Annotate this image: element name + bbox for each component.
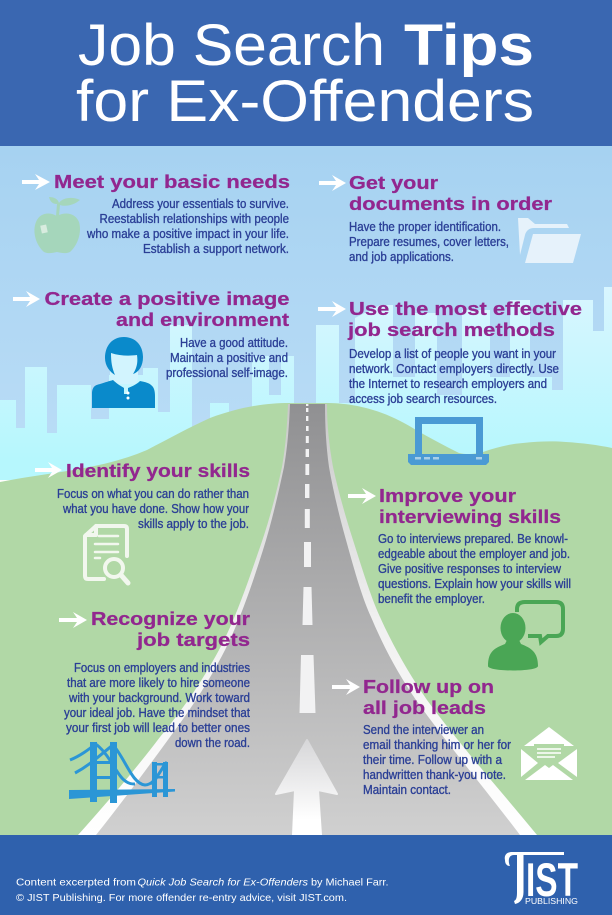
landscape: green hills [0,403,612,835]
heading: documents in order [349,194,552,214]
logo: JIST Publishing: IST [526,853,578,906]
body text: the Internet to research employers and [349,376,547,391]
body text: Have a good attitude. [180,335,288,350]
body text: benefit the employer. [378,591,485,606]
heading: job targets [136,630,250,650]
icon: envelope [521,727,577,780]
body text: Reestablish relationships with people [100,211,289,226]
arrow [332,679,360,695]
header band [0,0,612,146]
body text: network. Contact employers directly. Use [349,361,559,376]
body text: Prepare resumes, cover letters, [349,234,509,249]
heading: Meet your basic needs [54,172,290,192]
icon: bridge [69,742,175,803]
title: Tips [404,13,534,78]
arrow [35,462,62,478]
body text: questions. Explain how your skills will [378,576,571,591]
title: Job Search [78,13,385,78]
arrow [22,174,50,190]
heading [44,289,290,330]
footer credit text: Quick Job Search for Ex-Offenders [138,876,309,888]
heading: Improve your [379,486,516,506]
body text: edgeable about the employer and job. [378,546,570,561]
road [78,404,537,835]
footer band [0,835,612,915]
tip: create a positive image [13,289,290,408]
logo: JIST Publishing: PUBLISHING [525,897,578,906]
body text [166,335,288,380]
arrow [319,175,346,191]
body text [363,722,512,797]
body text: who make a positive impact in your life. [86,226,289,241]
body text: Have the proper identification. [349,219,501,234]
footer credit text: by Michael Farr. [311,876,388,888]
heading: all job leads [363,698,486,718]
heading: Create a positive image [44,289,290,309]
body text [378,531,571,606]
body text [64,660,250,750]
background: city skyline [0,287,612,480]
heading [347,299,582,340]
arrow [59,612,87,628]
road edge lines [78,404,537,835]
body text: Send the interviewer an [363,722,484,737]
body text: with your background. Work toward [68,690,250,705]
heading: job search methods [347,320,555,340]
centre dashes [300,404,316,713]
footer credit text [16,876,388,904]
road direction arrow [276,740,337,835]
heading: Follow up on [363,677,494,697]
road surface [96,404,520,835]
body text: and job applications. [349,249,454,264]
tip: meet your basic needs [22,172,290,256]
footer credit text: © JIST Publishing. For more offender re-entry advice, visit JIST.com. [16,892,347,904]
tip: improve your interviewing skills [348,486,571,670]
body text: Maintain a positive and [170,350,288,365]
heading [349,173,552,214]
body text: access job search resources. [349,391,497,406]
icon: laptop [408,417,489,465]
body text: Focus on what you can do rather than [57,486,249,501]
logo: JIST Publishing [505,852,578,906]
body text: skills apply to the job. [138,516,249,531]
body text [349,219,509,264]
body text: Go to interviews prepared. Be knowl- [378,531,568,546]
body text: your first job will lead to better ones [66,720,250,735]
background: sky [0,146,612,466]
heading: Use the most effective [349,299,582,319]
icon: folder [518,218,581,263]
body text [57,486,250,531]
arrow [13,291,40,307]
heading [363,677,494,718]
body text: professional self-image. [166,365,288,380]
title: for Ex-Offenders [76,69,534,134]
arrow [348,488,376,504]
heading: Recognize your [91,609,250,629]
body text: handwritten thank-you note. [363,767,506,782]
tip: most effective job search methods [318,299,582,465]
footer credit text: Content excerpted from [16,876,136,888]
icon: person with speech bubble [488,602,563,670]
body text [86,196,289,256]
heading [91,609,250,650]
body text: their time. Follow up with a [363,752,503,767]
body text: Establish a support network. [143,241,289,256]
tip: get your documents in order [319,173,581,264]
heading [379,486,561,527]
body text: Focus on employers and industries [74,660,250,675]
arrow [318,301,346,317]
icon: apple [34,197,80,253]
icon: woman [92,337,155,408]
body text [349,346,559,406]
tip: identify your skills [35,461,250,583]
body text: that are more likely to hire someone [67,675,250,690]
tip: follow up on all job leads [332,677,577,797]
body text: your ideal job. Have the mindset that [64,705,250,720]
heading: interviewing skills [379,507,561,527]
body text: Maintain contact. [363,782,451,797]
heading: Get your [349,173,438,193]
body text: Give positive responses to interview [378,561,562,576]
body text: down the road. [175,735,250,750]
heading: Identify your skills [66,461,250,481]
icon: document with magnifier [85,526,128,583]
body text: Address your essentials to survive. [112,196,289,211]
body text: Develop a list of people you want in your [349,346,557,361]
body text: email thanking him or her for [363,737,512,752]
body text: what you have done. Show how your [62,501,250,516]
heading: and environment [116,310,289,330]
title [76,13,534,134]
tip: recognize your job targets [59,609,250,803]
